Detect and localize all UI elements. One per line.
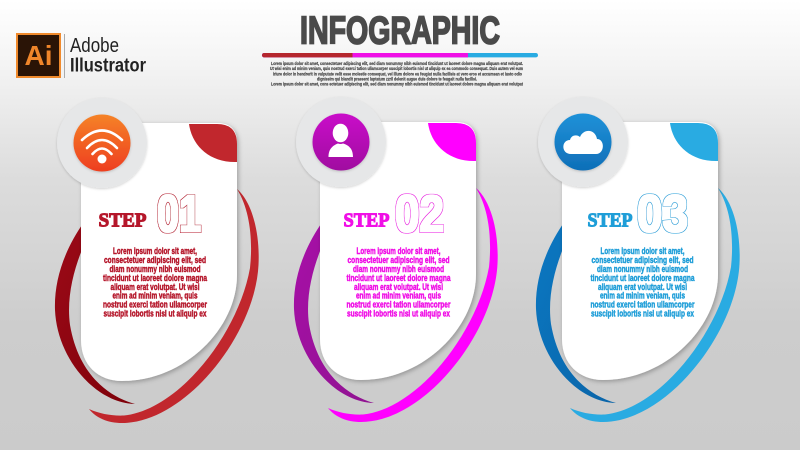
body text: tincidunt ut laoreet dolore magna (103, 273, 207, 283)
step label: STEP (98, 210, 146, 232)
body text: enim ad minim veniam, quis (356, 290, 441, 300)
body text (346, 246, 451, 318)
step number: 01 (157, 186, 201, 244)
step label: STEP (344, 210, 390, 232)
logo wordmark: Adobe (70, 35, 119, 57)
intro paragraph: Lorem ipsum dolor sit amet, cons ectetuer adipiscing elit, sed diam nonummy nibh euismod tincidunt ut laoreet dolore magna aliquam erat volutpat (271, 82, 523, 88)
step number: 02 (395, 186, 444, 244)
body text: consectetuer adipiscing elit, sed (592, 255, 694, 265)
body text: suscipit lobortis nisl ut aliquip ex (347, 308, 450, 318)
card (81, 123, 237, 381)
title: INFOGRAPHIC (300, 10, 500, 52)
body text: Lorem ipsum dolor sit amet, (600, 246, 684, 256)
step number: 03 (637, 186, 688, 244)
icon halo (296, 97, 386, 187)
icon: user (312, 114, 370, 170)
body text: consectetuer adipiscing elit, sed (348, 255, 450, 265)
icon: Ai badge: Ai (24, 40, 52, 71)
intro paragraph: Ut wisi enim ad minim veniam, quis nostrud exerci tation ullamcorper suscipit lobortis nisl ut aliquip ex ea commodo consequat. Duis autem vel eum (270, 66, 523, 72)
logo wordmark: Illustrator (70, 56, 147, 76)
body text: suscipit lobortis nisl ut aliquip ex (104, 308, 207, 318)
left swoosh (536, 221, 616, 403)
icon halo (538, 97, 628, 187)
body text (103, 246, 207, 318)
body text: diam nonummy nibh euismod (597, 264, 688, 274)
logo: Adobe Illustrator (17, 34, 147, 78)
card (320, 122, 476, 380)
icon: wifi (74, 114, 130, 172)
icon: cloud (554, 114, 612, 170)
right swoosh (328, 188, 498, 422)
body text: consectetuer adipiscing elit, sed (104, 255, 206, 265)
body text: suscipit lobortis nisl ut aliquip ex (591, 308, 694, 318)
logo wordmark (70, 35, 147, 76)
intro paragraph: Lorem ipsum dolor sit amet, consectetuer adipiscing elit, sed diam nonummy nibh euismod tincidunt ut laoreet dolore magna aliquam erat volutpat. (271, 61, 523, 67)
left swoosh (294, 221, 374, 403)
left swoosh (55, 222, 135, 404)
panel: step 3 (536, 97, 740, 422)
body text: Lorem ipsum dolor sit amet, (356, 246, 440, 256)
panel: step 1 (55, 98, 259, 423)
step label: STEP (588, 210, 632, 232)
card (562, 122, 718, 380)
body text: nostrud exerci tation ullamcorper (103, 300, 207, 310)
body text: aliquam erat volutpat. Ut wisi (110, 282, 200, 292)
corner leaf (670, 123, 718, 161)
body text: diam nonummy nibh euismod (110, 264, 200, 274)
icon halo (57, 98, 147, 188)
panel: step 2 (294, 97, 498, 422)
body text: nostrud exerci tation ullamcorper (346, 300, 451, 310)
body text: diam nonummy nibh euismod (353, 264, 444, 274)
corner leaf (189, 124, 237, 162)
right swoosh (570, 188, 740, 422)
intro paragraph: dignissim qui blandit praesent luptatum zzril delenit augue duis dolore te feugait nulla facilisi. (317, 76, 477, 82)
body text: tincidunt ut laoreet dolore magna (346, 273, 451, 283)
intro paragraph (270, 61, 523, 88)
body text: aliquam erat volutpat. Ut wisi (598, 282, 687, 292)
body text: Lorem ipsum dolor sit amet, (113, 246, 197, 256)
title colour bar (262, 53, 538, 57)
corner leaf (428, 123, 476, 161)
body text: nostrud exerci tation ullamcorper (590, 300, 695, 310)
right swoosh (89, 189, 259, 423)
intro paragraph: iriure dolor in hendrerit in vulputate velit esse molestie consequat, vel illum dolore eu feugiat nulla facilisis at vero eros et accumsan et iusto odio (273, 71, 522, 77)
body text: enim ad minim veniam, quis (112, 290, 198, 300)
body text: aliquam erat volutpat. Ut wisi (354, 282, 443, 292)
body text (590, 246, 695, 318)
body text: tincidunt ut laoreet dolore magna (590, 273, 695, 283)
body text: enim ad minim veniam, quis (600, 290, 685, 300)
